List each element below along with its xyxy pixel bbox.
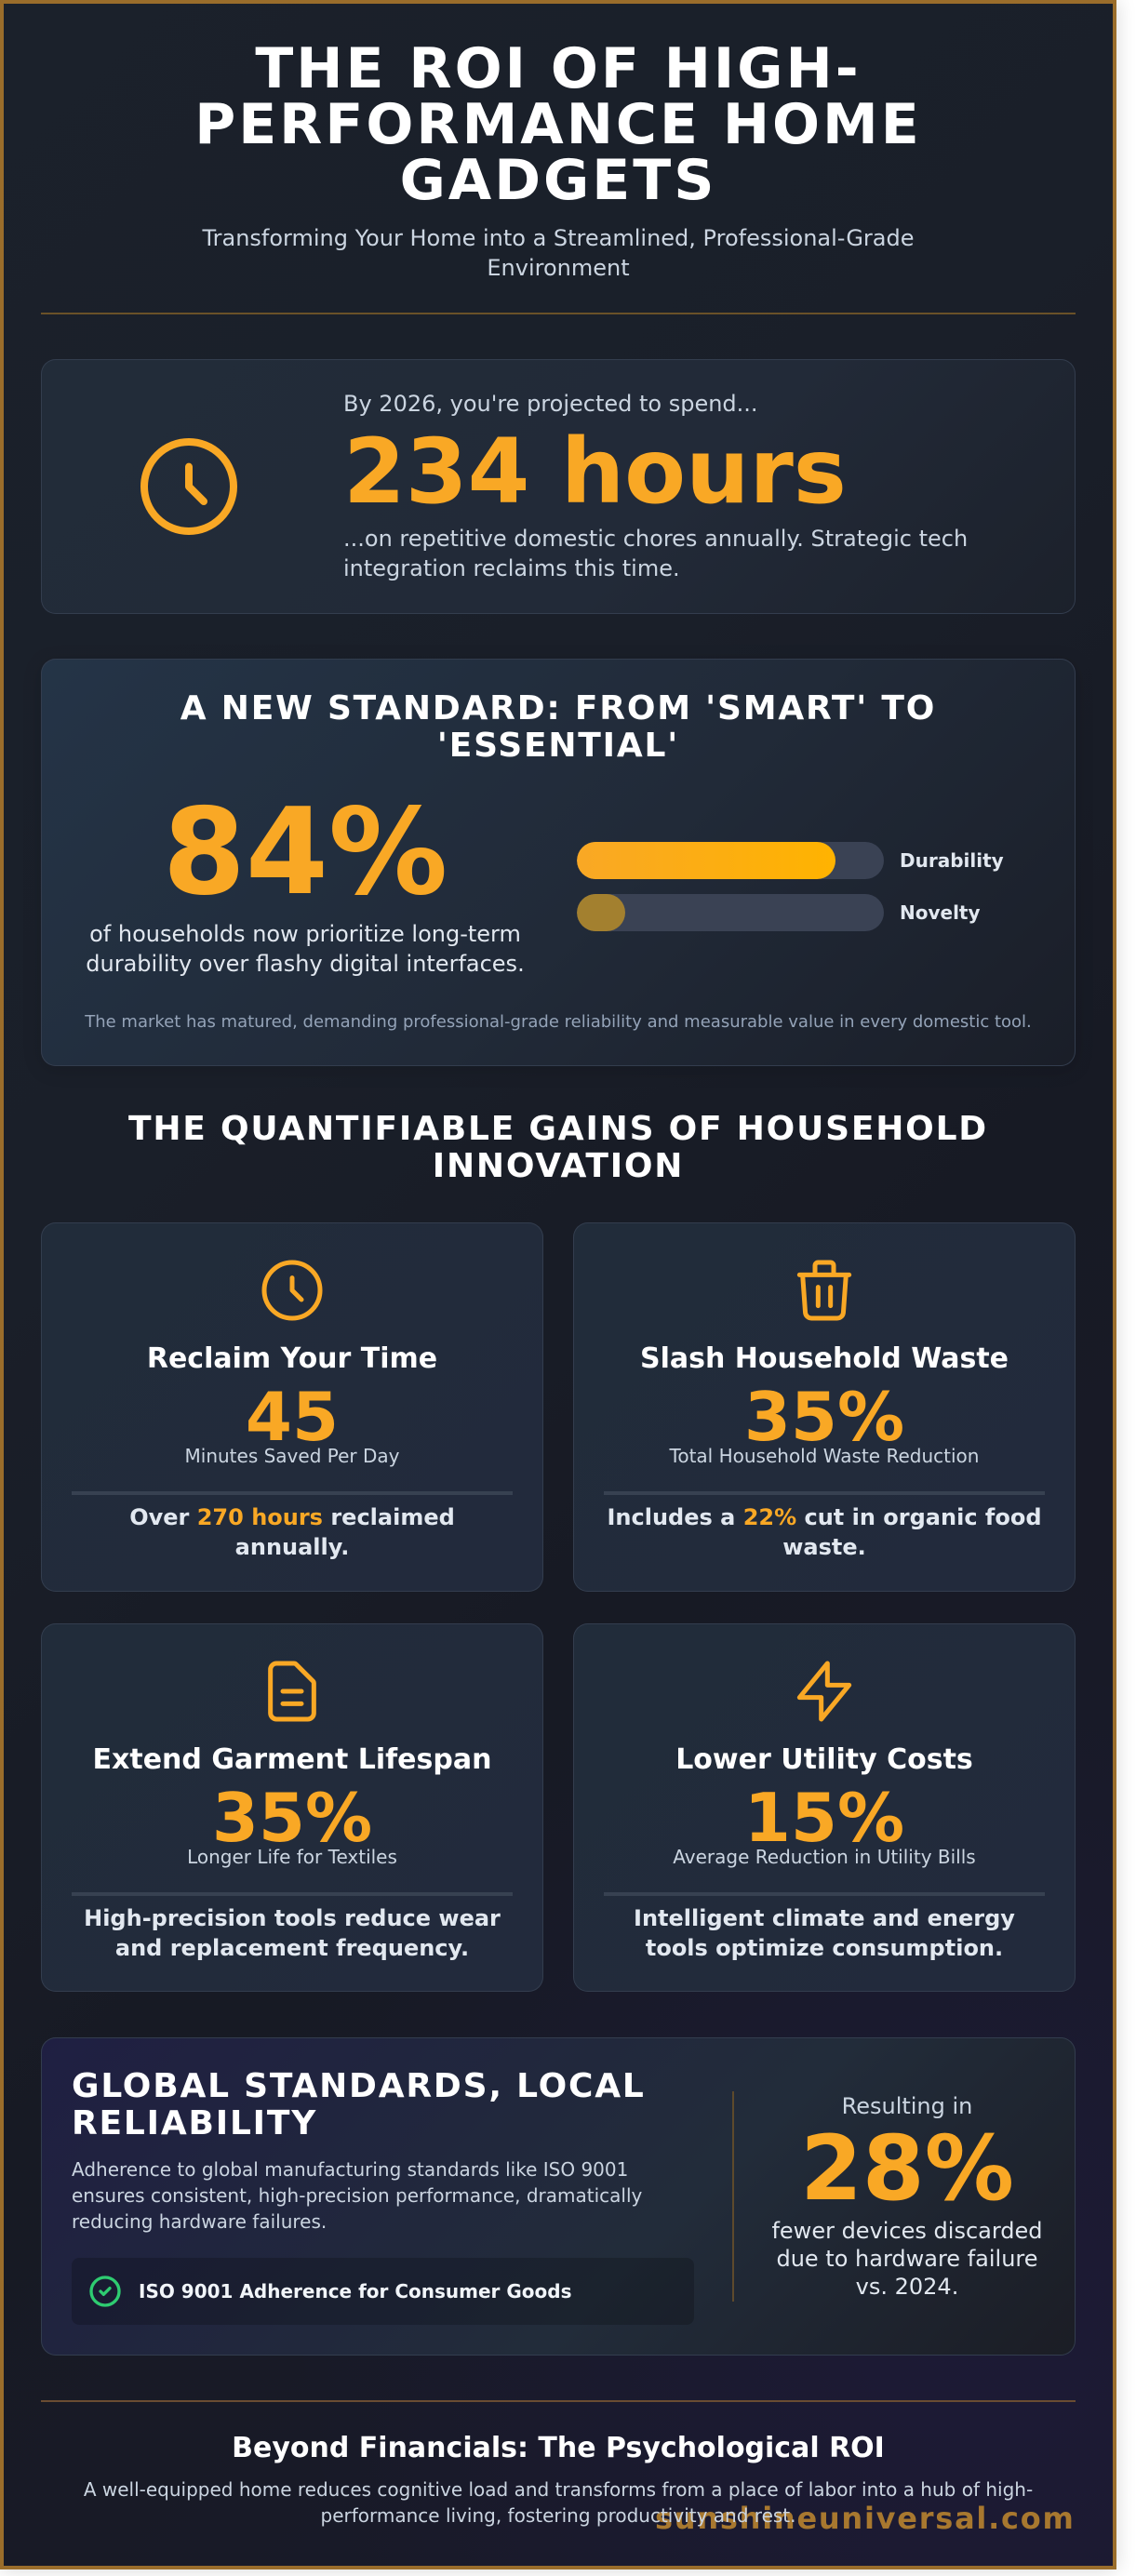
metric label: Average Reduction in Utility Bills bbox=[673, 1846, 976, 1868]
icon: lightning bolt bbox=[796, 1662, 852, 1721]
title: GADGETS bbox=[400, 148, 716, 213]
card note: and replacement frequency. bbox=[115, 1935, 469, 1961]
subtitle bbox=[202, 225, 914, 281]
subtitle: Environment bbox=[487, 255, 630, 281]
metric: 15% bbox=[744, 1779, 904, 1857]
metric: 35% bbox=[212, 1779, 372, 1857]
footnote: The market has matured, demanding professional-grade reliability and measurable value in every domestic tool. bbox=[85, 1012, 1032, 1032]
card note bbox=[634, 1905, 1015, 1961]
footer text: A well-equipped home reduces cognitive load and transforms from a place of labor into a hub of high- bbox=[84, 2478, 1033, 2501]
title: PERFORMANCE HOME bbox=[194, 92, 922, 157]
big number: 234 hours: 234 hours bbox=[343, 420, 847, 524]
description: durability over flashy digital interfaces. bbox=[86, 951, 525, 977]
badge label: ISO 9001 Adherence for Consumer Goods bbox=[139, 2280, 571, 2302]
card note: High-precision tools reduce wear bbox=[84, 1905, 501, 1931]
heading: A NEW STANDARD: FROM 'SMART' TO bbox=[180, 689, 936, 727]
card note bbox=[129, 1504, 455, 1560]
lead-in text: By 2026, you're projected to spend... bbox=[343, 391, 758, 417]
heading: GLOBAL STANDARDS, LOCAL bbox=[72, 2067, 646, 2105]
panel: extend garment lifespan bbox=[41, 1622, 543, 1992]
lead-in: Resulting in bbox=[842, 2093, 972, 2119]
paragraph: Adherence to global manufacturing standards like ISO 9001 bbox=[72, 2158, 628, 2181]
description: of households now prioritize long-term bbox=[89, 921, 521, 947]
description bbox=[86, 921, 525, 977]
card title: Extend Garment Lifespan bbox=[93, 1743, 491, 1776]
metric label: Minutes Saved Per Day bbox=[185, 1445, 399, 1467]
bar: durability bbox=[577, 842, 884, 879]
paragraph bbox=[72, 2158, 642, 2233]
subtitle: Transforming Your Home into a Streamlined, Professional-Grade bbox=[202, 225, 914, 251]
panel: reclaim your time bbox=[41, 1222, 543, 1592]
icon: clock bbox=[262, 1260, 322, 1321]
heading bbox=[72, 2067, 646, 2142]
result text: fewer devices discarded bbox=[771, 2218, 1043, 2244]
card note bbox=[607, 1504, 1042, 1560]
label: novelty: Novelty bbox=[900, 901, 981, 924]
metric: 35% bbox=[744, 1378, 904, 1456]
result text: vs. 2024. bbox=[856, 2274, 958, 2300]
panel: lower utility costs bbox=[573, 1622, 1076, 1992]
follow-up text: integration reclaims this time. bbox=[343, 555, 680, 581]
badge: ISO 9001 bbox=[72, 2258, 694, 2325]
paragraph: reducing hardware failures. bbox=[72, 2210, 327, 2233]
card note: Includes a 22% cut in organic food bbox=[607, 1504, 1042, 1530]
icon: check circle bbox=[89, 2276, 121, 2307]
follow-up text bbox=[343, 526, 968, 581]
card note: tools optimize consumption. bbox=[646, 1935, 1003, 1961]
metric label: Total Household Waste Reduction bbox=[670, 1445, 979, 1467]
card note: annually. bbox=[235, 1534, 349, 1560]
card title: Lower Utility Costs bbox=[675, 1743, 973, 1776]
vertical separator bbox=[732, 2091, 734, 2302]
card title: Reclaim Your Time bbox=[147, 1342, 437, 1375]
result text: due to hardware failure bbox=[776, 2246, 1038, 2272]
title: THE ROI OF HIGH- bbox=[255, 36, 862, 101]
bar chart: durability vs novelty bbox=[577, 842, 1004, 931]
big number: 28%: 28% bbox=[800, 2116, 1014, 2221]
big number: 84%: 84% bbox=[163, 783, 448, 922]
metric: 45 bbox=[246, 1378, 339, 1456]
header divider bbox=[41, 313, 1076, 314]
card note bbox=[84, 1905, 501, 1961]
footer heading: Beyond Financials: The Psychological ROI bbox=[232, 2432, 885, 2464]
panel: slash household waste bbox=[573, 1222, 1076, 1592]
icon: clock bbox=[140, 438, 237, 535]
card title: Slash Household Waste bbox=[640, 1342, 1009, 1375]
icon: trash can bbox=[796, 1260, 852, 1321]
heading: 'ESSENTIAL' bbox=[437, 727, 679, 765]
card note: waste. bbox=[782, 1534, 866, 1560]
watermark: sunshineuniversal.com bbox=[655, 2501, 1076, 2536]
footer divider bbox=[41, 2400, 1076, 2402]
paragraph: ensures consistent, high-precision performance, dramatically bbox=[72, 2184, 642, 2207]
card note: Intelligent climate and energy bbox=[634, 1905, 1015, 1931]
footer text: performance living, fostering productivity and rest. bbox=[320, 2504, 796, 2527]
bar: novelty bbox=[577, 894, 884, 931]
panel: 234 hours bbox=[41, 359, 1076, 614]
follow-up text: ...on repetitive domestic chores annually. Strategic tech bbox=[343, 526, 968, 552]
metric label: Longer Life for Textiles bbox=[187, 1846, 397, 1868]
section heading bbox=[128, 1110, 988, 1185]
panel: global standards bbox=[41, 2037, 1076, 2356]
icon: document bbox=[268, 1662, 316, 1721]
label: durability: Durability bbox=[900, 849, 1004, 872]
result text bbox=[771, 2218, 1043, 2300]
title bbox=[194, 36, 922, 213]
card note: Over 270 hours reclaimed bbox=[129, 1504, 455, 1530]
panel: a new standard bbox=[41, 659, 1076, 1066]
footer text bbox=[84, 2478, 1033, 2527]
heading: RELIABILITY bbox=[72, 2104, 317, 2142]
section heading: INNOVATION bbox=[433, 1147, 684, 1185]
section heading: THE QUANTIFIABLE GAINS OF HOUSEHOLD bbox=[128, 1110, 988, 1148]
heading bbox=[180, 689, 936, 765]
